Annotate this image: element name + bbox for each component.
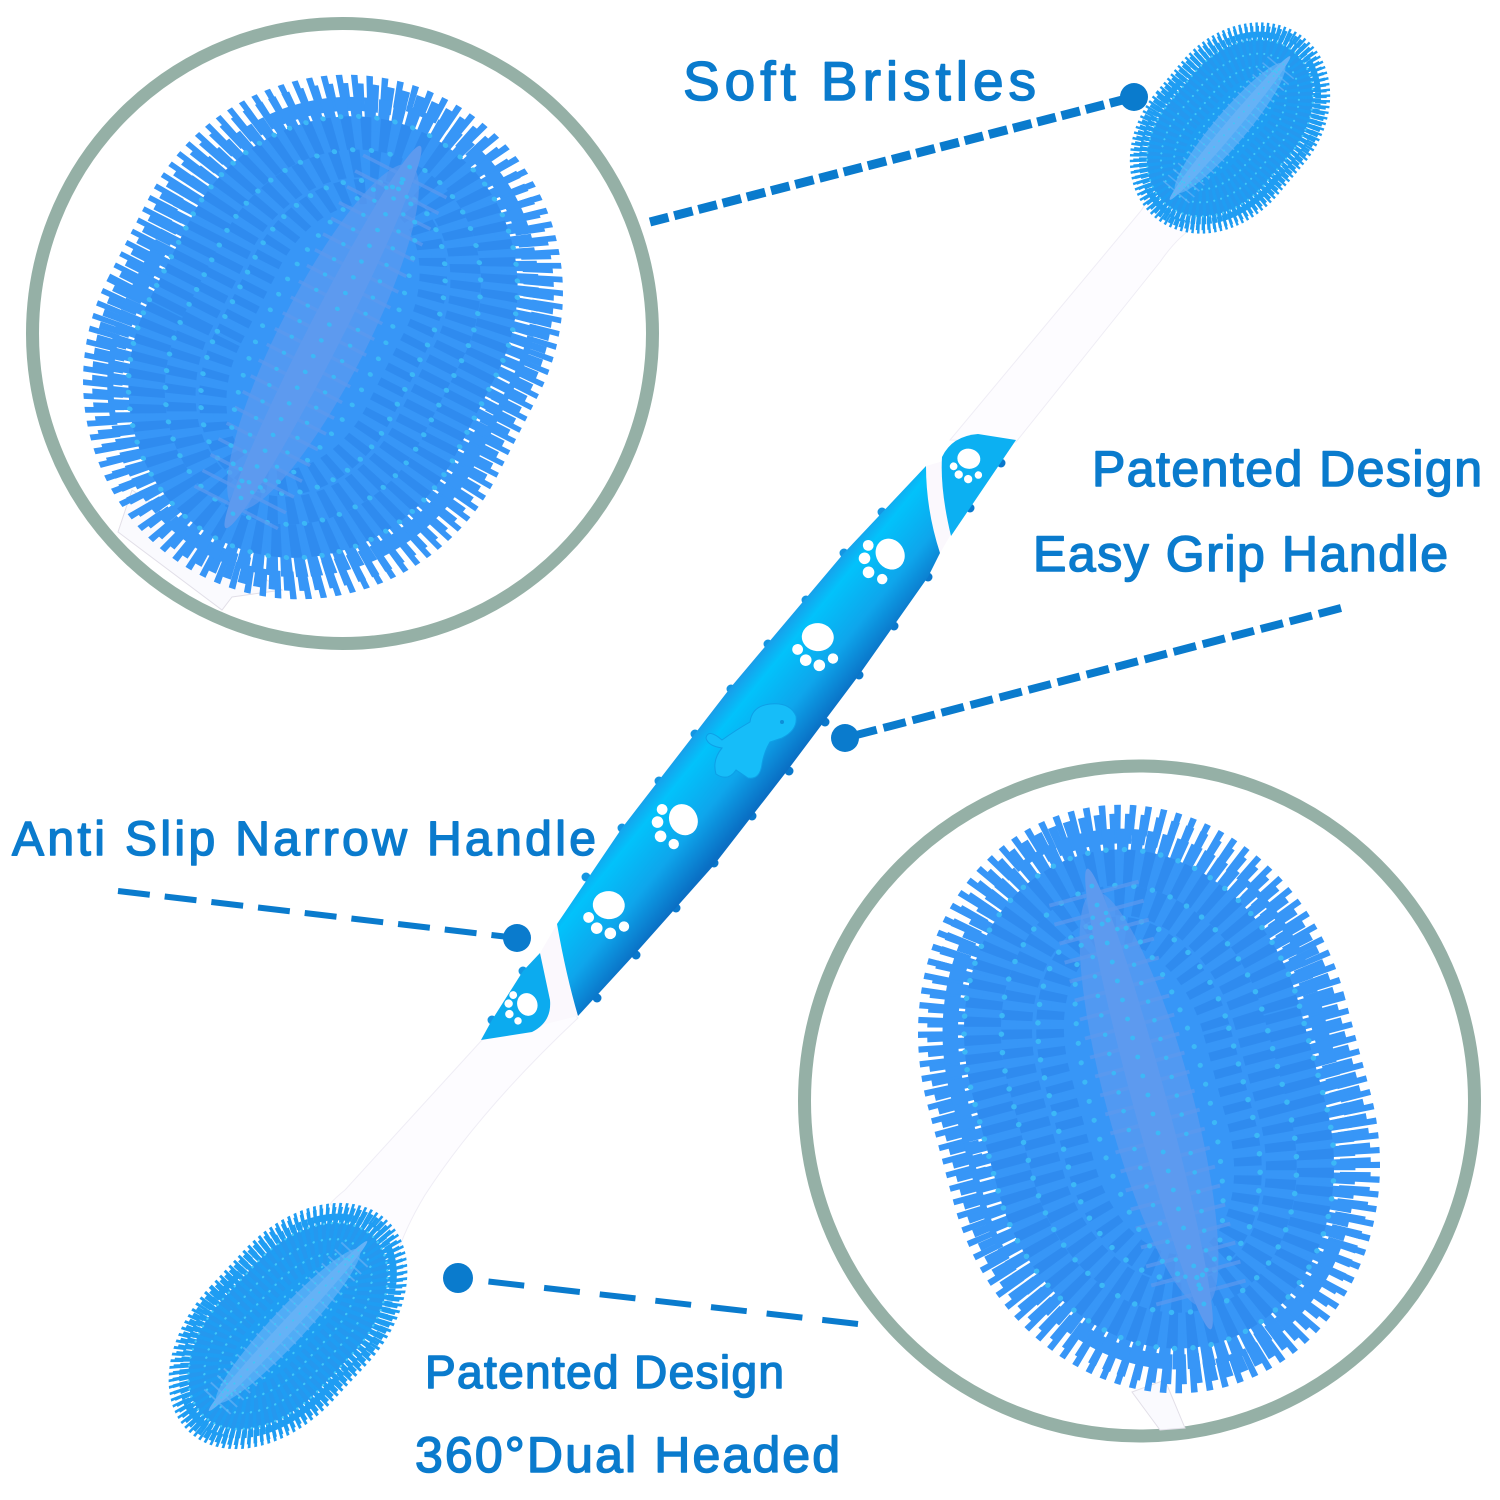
brush head: bottom-left small bbox=[137, 1172, 439, 1480]
label: anti slip narrow handle: Anti Slip Narrow Handle bbox=[12, 813, 596, 866]
enlarged brush head: top-left bbox=[27, 18, 619, 656]
icon: paw print 1 bbox=[849, 526, 914, 591]
leader line: soft bristles bbox=[650, 83, 1148, 222]
ring: top-left circle bbox=[32, 24, 652, 644]
label: patented design, bottom: Patented Design bbox=[425, 1346, 784, 1398]
callout: soft bristles bbox=[650, 50, 1148, 222]
label: easy grip handle: Easy Grip Handle bbox=[1033, 526, 1448, 582]
grip bumps bbox=[488, 458, 1006, 1024]
main blue grip bbox=[557, 466, 940, 1016]
brush head: top-right small bbox=[1102, 0, 1358, 261]
enlarged brush head: bottom-right bbox=[882, 774, 1416, 1424]
leader line: dual headed bbox=[443, 1263, 858, 1324]
panel: bottom-right zoom circle bbox=[804, 766, 1474, 1436]
callout: 360 dual headed bbox=[415, 1263, 858, 1483]
icon: dog emboss bbox=[706, 704, 796, 778]
icon: paw print 3 bbox=[642, 792, 706, 855]
upper blue cap bbox=[942, 434, 1016, 536]
label: 360 dual headed: 360°Dual Headed bbox=[415, 1427, 840, 1483]
handle shaft: lower white section bbox=[330, 1000, 578, 1258]
icon: upper cap paw bbox=[947, 446, 986, 485]
callout: anti slip narrow handle bbox=[12, 813, 596, 952]
icon: lower cap paw bbox=[498, 985, 542, 1028]
leader line: anti slip handle bbox=[118, 891, 531, 952]
icon: paw print 2 bbox=[791, 621, 841, 673]
panel: top-left zoom circle bbox=[27, 18, 653, 656]
handle shaft: upper white section bbox=[950, 186, 1196, 442]
icon: paw print 4 bbox=[582, 889, 632, 941]
label: soft bristles: Soft Bristles bbox=[683, 50, 1036, 112]
lower blue cap bbox=[481, 953, 550, 1040]
handle stem inside top-left circle bbox=[118, 490, 282, 610]
callout: easy grip handle bbox=[831, 441, 1482, 752]
ring: bottom-right circle bbox=[804, 766, 1474, 1436]
leader line: easy grip handle bbox=[831, 608, 1341, 752]
label: patented design, right: Patented Design bbox=[1092, 441, 1482, 497]
handle stem inside bottom-right circle bbox=[1132, 1380, 1185, 1430]
white middle of handle behind stripes bbox=[482, 440, 1016, 1040]
